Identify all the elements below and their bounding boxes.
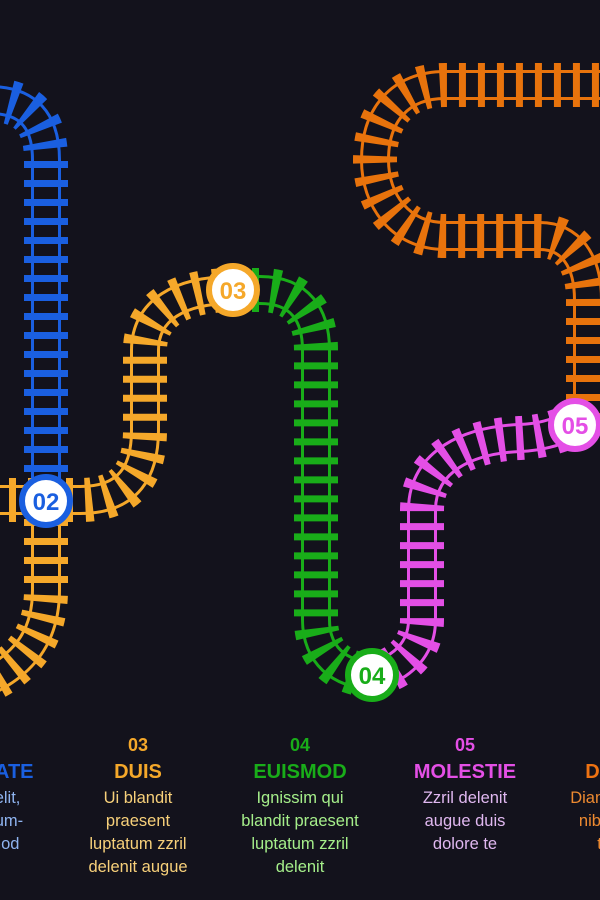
station 03: 03: [220, 278, 246, 305]
station 04: [348, 651, 396, 699]
track: orange top: [375, 85, 600, 420]
station 02: 02: [33, 489, 59, 516]
text: step 04: EUISMOD: [253, 761, 347, 783]
text: step 02: [0, 761, 34, 853]
station 02: [22, 477, 70, 525]
track: blue: [0, 100, 46, 500]
station 04: 04: [359, 663, 386, 690]
text: step 04: luptatum zzril: [251, 835, 349, 853]
text: step 03: praesent: [106, 812, 170, 830]
text: step 05: augue duis: [425, 812, 505, 830]
text: step 05: Zzril delenit: [423, 789, 507, 807]
text: step 03: luptatum zzril: [89, 835, 187, 853]
text: step 03: Ui blandit: [104, 789, 172, 807]
text: step 05: [414, 735, 516, 853]
station 05: 05: [562, 413, 588, 440]
track: green: [233, 290, 372, 675]
text: step 04: [241, 735, 359, 876]
text: step 05: MOLESTIE: [414, 761, 516, 783]
text: step 06: [570, 761, 600, 853]
text: step 05: dolore te: [433, 835, 497, 853]
text: step 04: 04: [290, 735, 310, 755]
text: step 04: blandit praesent: [241, 812, 359, 830]
text: step 03: 03: [128, 735, 148, 755]
station 05: [551, 401, 599, 449]
text: step 04: Ignissim qui: [256, 789, 344, 807]
track: pink: [372, 425, 575, 675]
text: step 05: 05: [455, 735, 475, 755]
text: step 03: delenit augue: [88, 858, 188, 876]
text: step 04: delenit: [276, 858, 324, 876]
text: step 03: DUIS: [114, 761, 162, 783]
track: yellow: [0, 290, 233, 680]
railway map: [0, 63, 600, 702]
text: step 03: [88, 735, 188, 876]
station 03: [209, 266, 257, 314]
